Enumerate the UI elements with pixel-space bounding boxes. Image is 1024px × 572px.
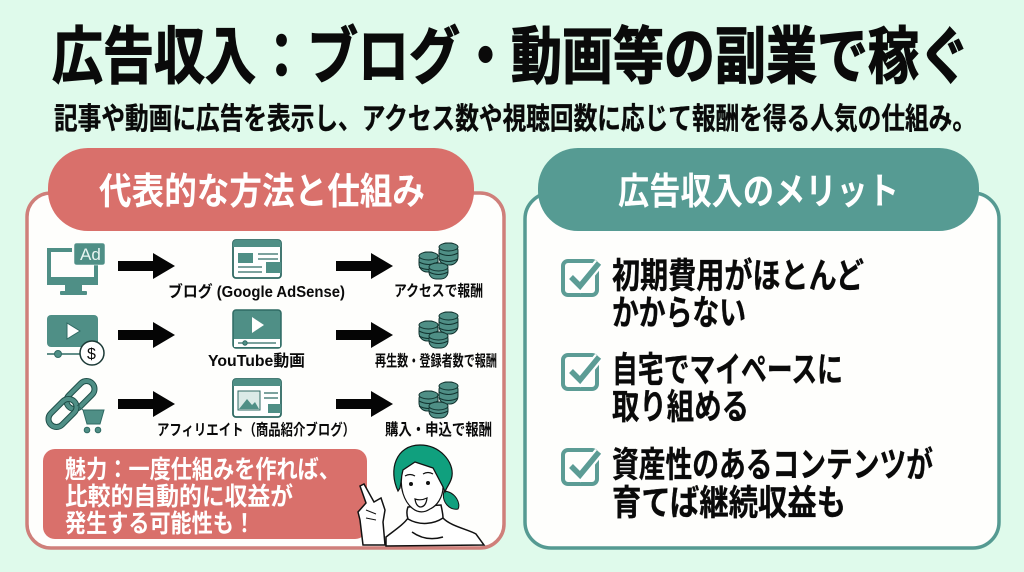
merit 3 text: 資産性のあるコンテンツが [612, 446, 933, 485]
callout: appeal [43, 449, 367, 539]
icon: video player [233, 310, 281, 348]
icon: video with dollar [47, 315, 104, 365]
label: purchase reward: 購入・申込で報酬 [385, 421, 492, 439]
label: blog: ブログ (Google AdSense) [168, 282, 345, 301]
label: affiliate: アフィリエイト（商品紹介ブログ） [157, 420, 355, 439]
merit 1 text: 初期費用がほとんど [612, 257, 864, 296]
icon: monitor with Ad badge: Ad [80, 245, 101, 264]
heading: methods [48, 148, 474, 231]
label: access reward: アクセスで報酬 [394, 282, 483, 300]
merit 1 [563, 257, 864, 333]
icon: blog page [233, 240, 281, 278]
merit 3 text: 育てば継続収益も [612, 484, 846, 523]
callout: appeal: 発生する可能性も！ [65, 510, 255, 538]
icon: check [563, 355, 599, 389]
row 2: video to YouTube to views reward [47, 310, 497, 370]
panel: merits [525, 148, 999, 548]
callout: appeal: 比較的自動的に収益が [65, 482, 293, 511]
heading: merits [538, 148, 979, 231]
icon: chain and cart [45, 378, 104, 433]
row 1: ad monitor to blog to access reward [47, 240, 483, 301]
arrow [336, 253, 393, 279]
arrow [336, 391, 393, 417]
icon: coins [419, 312, 458, 348]
merit 2 [563, 351, 843, 427]
merit 1 text: かからない [612, 294, 746, 333]
merit 2 text: 取り組める [612, 388, 749, 427]
callout: appeal: 魅力：一度仕組みを作れば、 [65, 456, 340, 484]
illustration: pointing woman [358, 445, 484, 546]
heading: merits: 広告収入のメリット [618, 171, 899, 212]
label: YouTube: YouTube動画 [208, 352, 305, 370]
icon: check [563, 261, 599, 295]
row 3: link and cart to affiliate blog to purchase reward [45, 378, 492, 439]
icon: check [563, 450, 599, 484]
arrow [118, 322, 175, 348]
icon: video with dollar: $ [87, 346, 96, 363]
icon: coins [419, 243, 458, 279]
icon: article with image [233, 379, 281, 417]
panel: methods and mechanism [27, 148, 504, 548]
merit 2 text: 自宅でマイペースに [612, 351, 843, 390]
label: views reward: 再生数・登録者数で報酬 [375, 351, 497, 370]
heading: methods: 代表的な方法と仕組み [99, 171, 425, 212]
arrow [336, 322, 393, 348]
arrow [118, 391, 175, 417]
icon: monitor with Ad badge [47, 243, 105, 295]
icon: coins [419, 382, 458, 418]
merit 3 [563, 446, 933, 523]
arrow [118, 253, 175, 279]
